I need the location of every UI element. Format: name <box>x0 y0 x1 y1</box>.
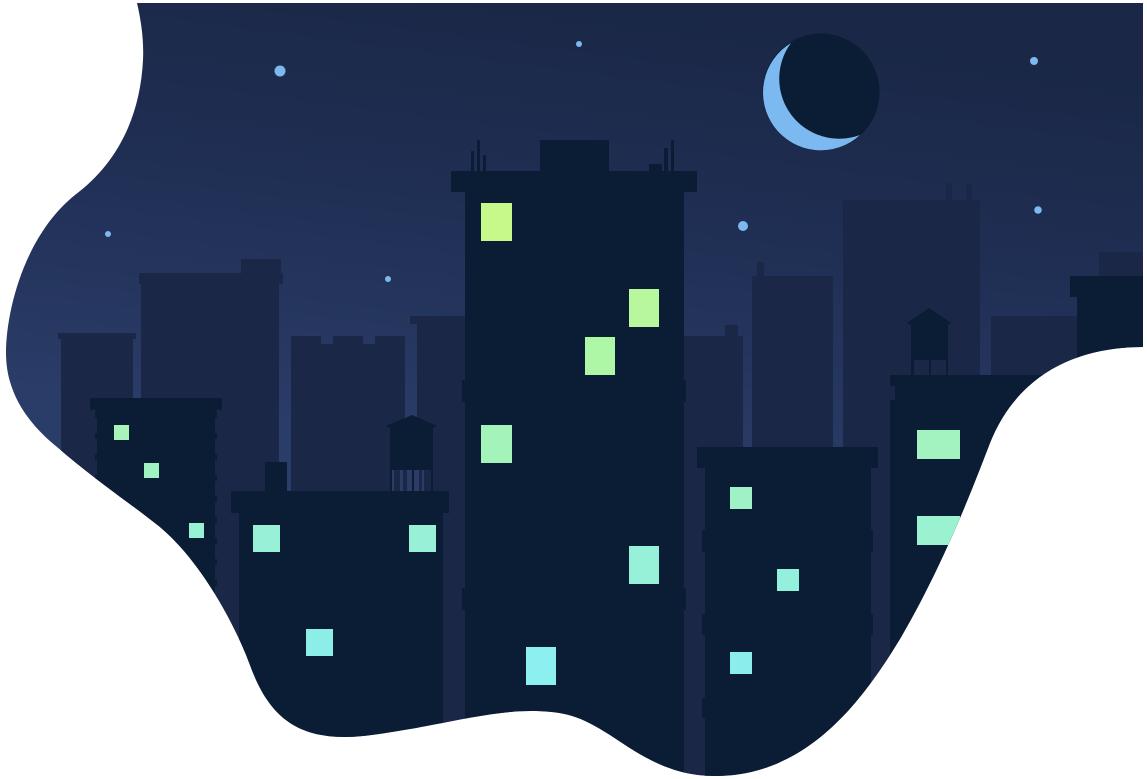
lit windows <box>114 203 960 685</box>
right-centre building <box>697 447 878 779</box>
main tower <box>451 140 697 779</box>
water tank left <box>386 415 437 492</box>
left building with scalloped edges <box>90 398 222 594</box>
water tank right <box>907 308 951 376</box>
far-right building <box>890 276 1143 655</box>
second building <box>231 462 449 752</box>
crescent moon <box>762 34 880 150</box>
stars <box>105 41 1042 282</box>
background buildings <box>58 183 1143 779</box>
